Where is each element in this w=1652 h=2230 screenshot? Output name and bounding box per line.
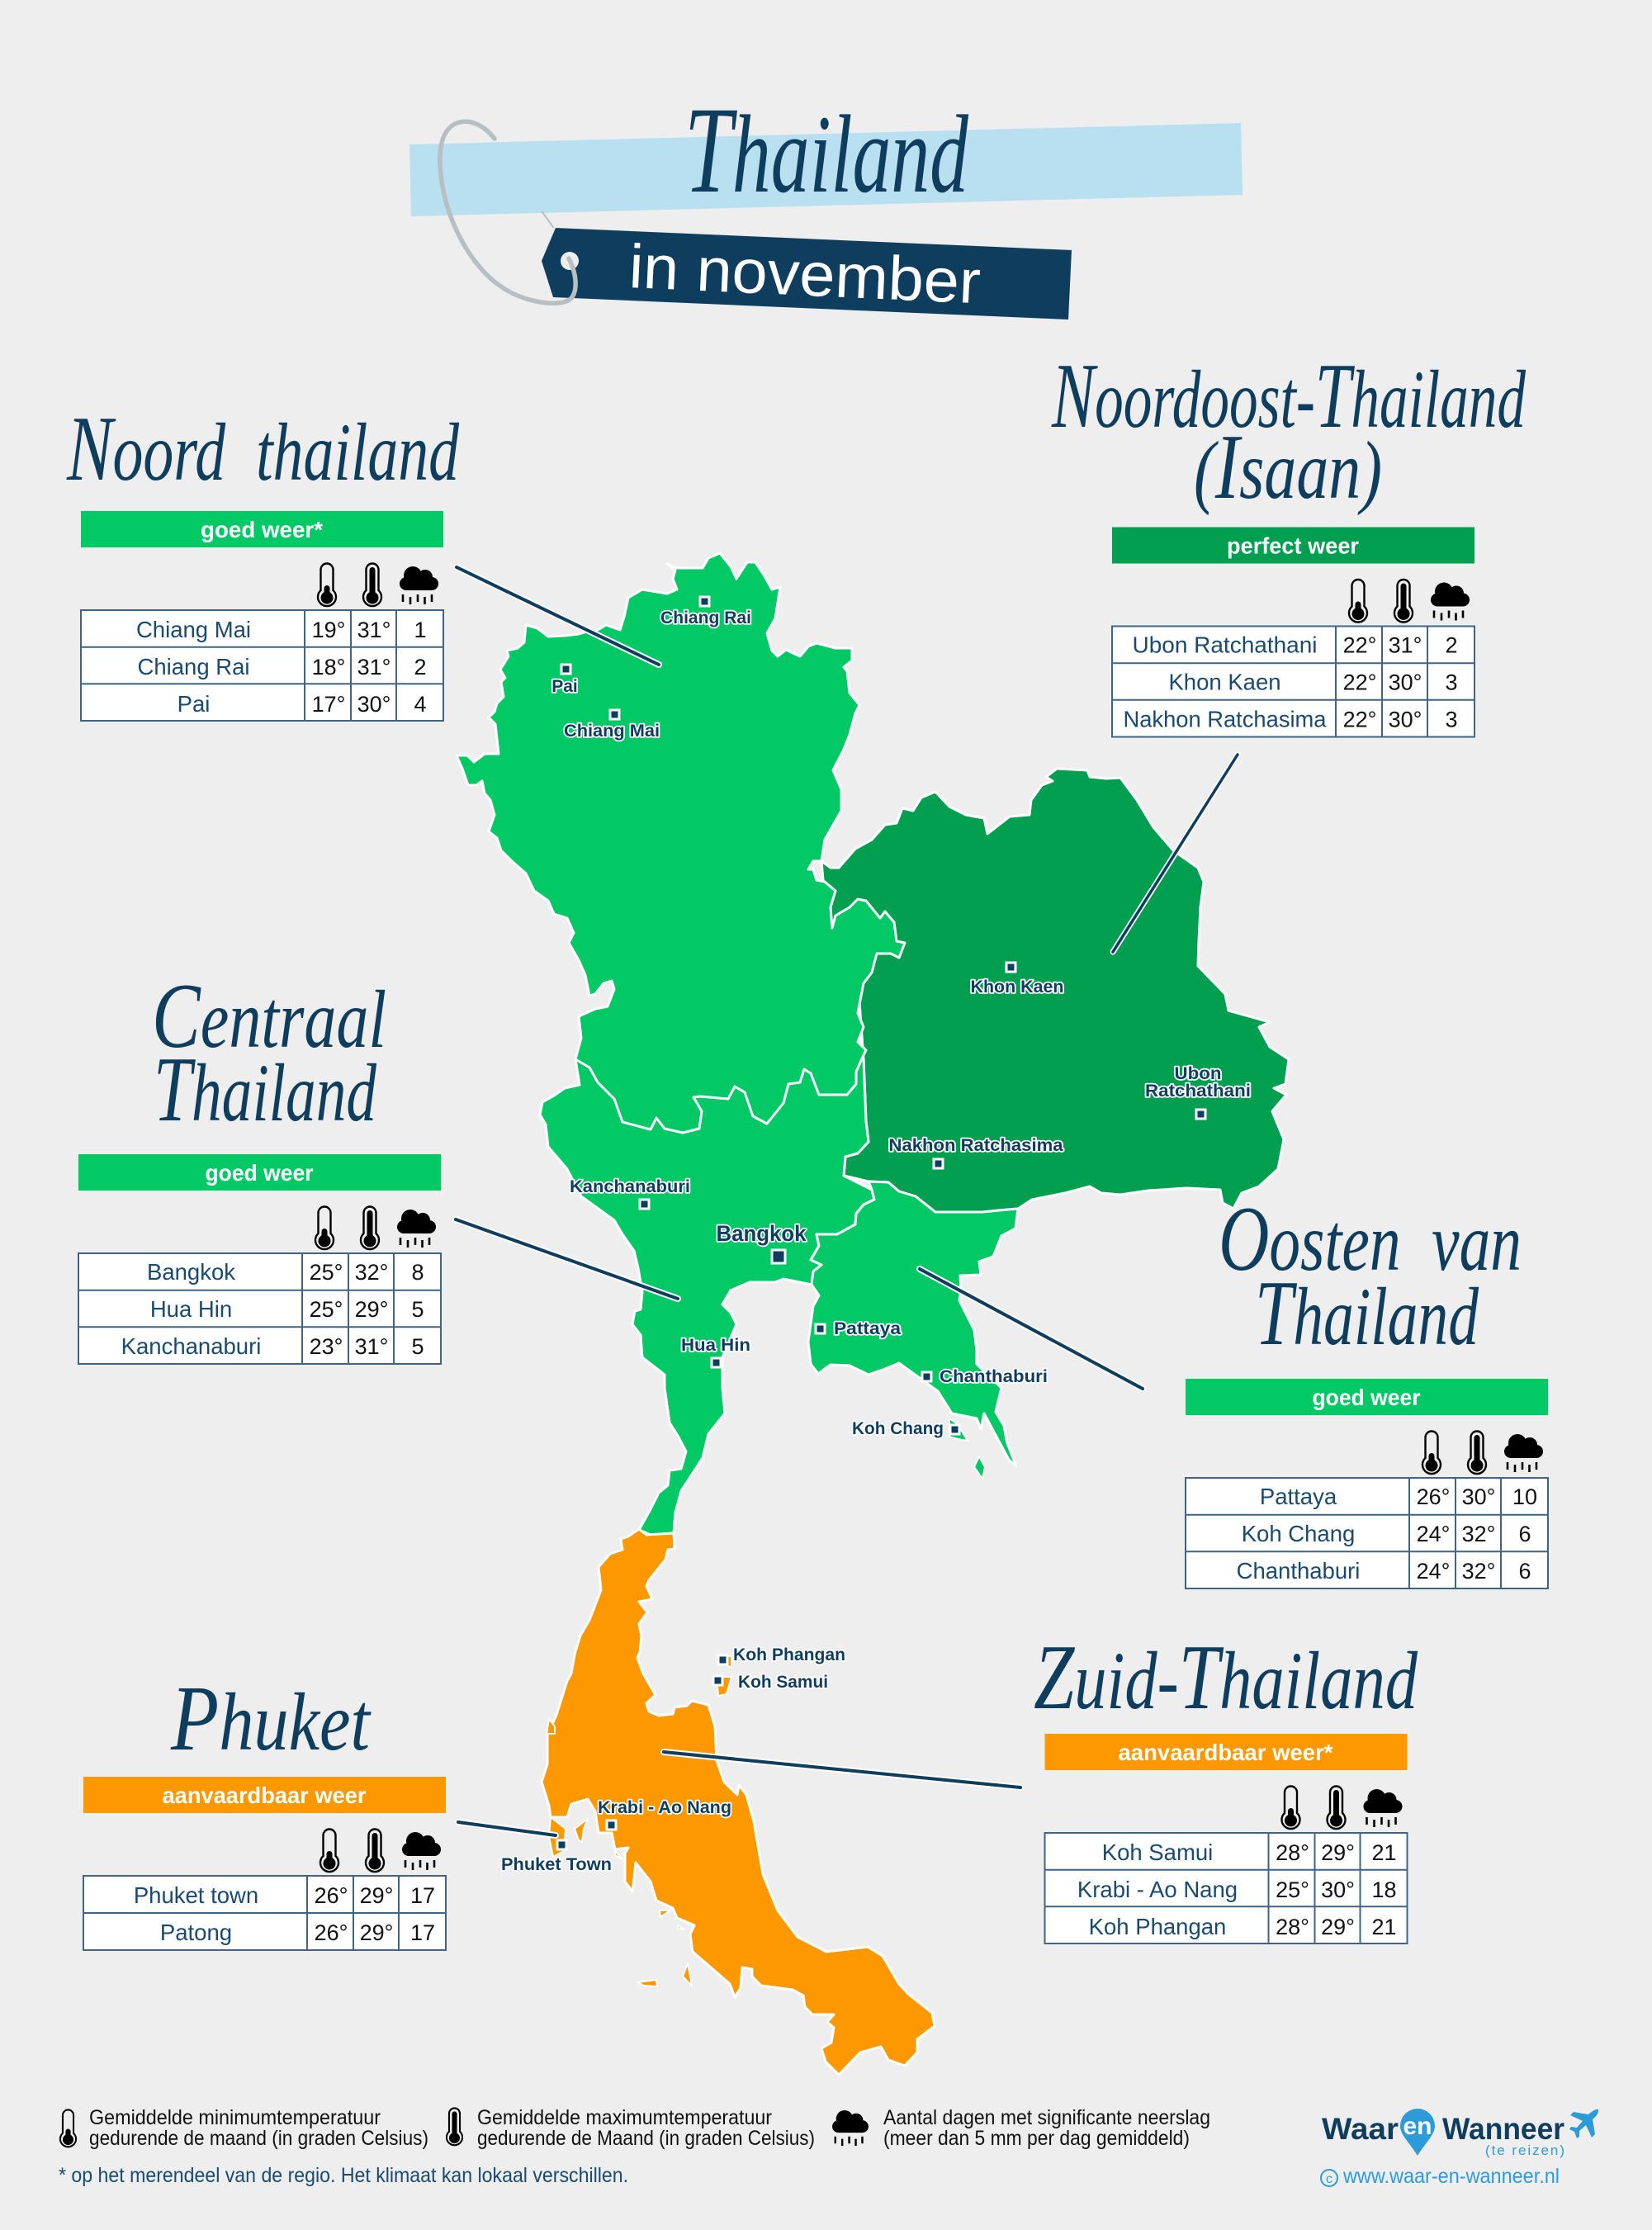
legend text: rain: (meer dan 5 mm per dag gemiddeld) [883,2127,1190,2150]
table: Chanthaburi [1237,1558,1360,1584]
leader line: central [456,1219,678,1299]
city: Koh Phangan: Koh Phangan [733,1645,845,1664]
city: Chanthaburi: Chanthaburi [940,1367,1048,1386]
table: Bangkok [147,1259,235,1285]
table: Koh Phangan [1089,1914,1226,1939]
table [1112,626,1474,736]
table: Chiang Mai [136,617,251,642]
table: 10 [1512,1484,1537,1509]
leader line: east [920,1269,1143,1389]
table: 29° [360,1883,393,1908]
legend text: rain: Aantal dagen met significante neerslag [883,2106,1210,2129]
city markers [501,597,1251,1874]
heading [152,966,386,1141]
icon: max temperature [361,1207,379,1249]
table: Nakhon Ratchasima [1123,707,1327,731]
table [81,610,443,721]
city: Nakhon Ratchasima [888,1136,1063,1168]
table [78,1253,441,1364]
rating bar [83,1777,446,1813]
table: Patong [160,1920,232,1945]
rating bar: aanvaardbaar weer* [1118,1740,1333,1765]
table: Hua Hin [150,1296,232,1322]
city: Chiang Rai [660,597,751,627]
table: 30° [357,692,391,717]
city: Pai: Pai [551,677,578,696]
table: 28° [1276,1840,1309,1865]
rating bar: perfect weer [1227,533,1359,558]
table: Koh Chang [1242,1521,1355,1546]
heading: Noord thailand [66,399,460,500]
table: 3 [1445,670,1458,695]
table: Pattaya [1260,1484,1337,1509]
table: 17° [312,692,345,717]
table: 4 [414,692,427,717]
city: Hua Hin [681,1336,750,1367]
city: Ubon Ratchathani: Ratchathani [1145,1082,1251,1101]
city: Bangkok: Bangkok [717,1221,807,1246]
icon: min temperature [1281,1787,1299,1829]
table: Kanchanaburi [121,1333,261,1359]
panel: Zuid-Thailand [1034,1627,1418,1944]
table: 26° [315,1883,348,1908]
panel: Noordoost-Thailand [1051,346,1527,736]
table: 30° [1389,670,1422,695]
city: Koh Samui: Koh Samui [738,1673,828,1692]
table: 2 [414,655,427,679]
region: north [457,553,905,1133]
rating bar [81,511,443,547]
table: Ubon Ratchathani [1133,632,1317,657]
tag: in november: in november [627,231,982,316]
tag string back [542,212,553,227]
panel: Noord thailand [66,399,460,721]
icon: min temperature [315,1207,334,1249]
heading: Thailand [154,1039,377,1141]
icon: min temperature [318,563,336,606]
icon: rain [1364,1789,1402,1827]
icon: rain [400,566,438,604]
table: 25° [310,1260,343,1285]
legend text: rain [883,2106,1210,2150]
table: 17 [410,1920,435,1945]
logo: Waar en Wanneer: Waar [1322,2112,1399,2146]
icon: min temperature [1349,580,1367,623]
rating bar [1045,1734,1407,1770]
city: Chiang Mai [564,710,660,741]
icon: legend min temperature [60,2109,76,2147]
table: 25° [1276,1877,1309,1902]
icon: rain [1431,583,1470,621]
weather panel [78,1154,441,1364]
icon: min temperature [320,1830,338,1872]
table: 26° [315,1920,348,1945]
table: Phuket town [134,1882,258,1908]
icon: airplane [1569,2109,1598,2138]
table: 32° [355,1260,388,1285]
tag ring [440,121,575,303]
leader line: Phuket [458,1822,556,1835]
region: north-east [821,769,1289,1212]
city: Phuket Town [501,1840,612,1874]
heading [1051,346,1527,518]
table: Koh Samui [1102,1839,1213,1865]
legend text: max temperature: Gemiddelde maximumtemperatuur [477,2106,772,2129]
rating bar [1112,527,1474,563]
legend text: max temperature [477,2106,815,2150]
leader line: south [664,1752,1020,1787]
website link: www.waar-en-wanneer.nl [1342,2165,1560,2188]
table: 29° [355,1297,388,1322]
table: 3 [1445,707,1458,731]
icon: rain [397,1210,436,1248]
table: 22° [1343,670,1376,695]
legend text: min temperature: Gemiddelde minimumtemperatuur [89,2106,381,2129]
table: 5 [411,1334,424,1359]
icon: legend max temperature [447,2108,462,2145]
weather panel [1112,527,1474,736]
table: 31° [357,618,391,642]
city: Nakhon Ratchasima: Nakhon Ratchasima [888,1136,1063,1155]
heading: (Isaan) [1194,417,1382,518]
icon: map pin: en [1403,2113,1432,2140]
city: Chiang Rai: Chiang Rai [660,608,751,627]
table: 21 [1371,1915,1397,1939]
weather panel [81,511,443,721]
table: Krabi - Ao Nang [1077,1877,1238,1902]
heading [1219,1189,1522,1365]
legend text: min temperature [89,2106,428,2150]
rating bar: aanvaardbaar weer [162,1783,367,1808]
table: 28° [1276,1915,1309,1939]
heading: Oosten van [1219,1189,1522,1290]
city: Koh Chang: Koh Chang [852,1419,944,1438]
heading: Zuid- Thailand [1034,1627,1418,1729]
table: 25° [310,1297,343,1322]
icon: max temperature [1468,1432,1486,1474]
table: 17 [410,1883,435,1908]
tag: in november [542,228,1072,320]
icon: max temperature [1394,580,1413,623]
table: 22° [1343,632,1376,657]
table: 19° [312,618,345,642]
panel: Phuket [83,1669,446,1950]
title ribbon [409,123,1243,216]
legend text: min temperature: gedurende de maand (in graden Celsius) [89,2127,428,2150]
city: Kanchanaburi [570,1177,690,1209]
icon: max temperature [366,1830,384,1872]
table: 18° [312,655,345,679]
table: 30° [1321,1877,1355,1902]
region: central [540,1032,874,1535]
weather panel [1045,1734,1407,1944]
table: 26° [1417,1484,1450,1509]
table: 24° [1417,1559,1450,1584]
table: 6 [1518,1522,1531,1546]
heading: Centraal [152,966,386,1068]
rating bar: goed weer* [201,517,323,542]
table: 18 [1371,1877,1397,1902]
city: Ubon Ratchathani: Ubon [1174,1064,1222,1083]
table: Pai [178,691,210,717]
city: Ubon Ratchathani [1145,1064,1251,1119]
city: Pattaya: Pattaya [834,1319,901,1338]
table: 31° [1389,632,1422,657]
weather panel [83,1777,446,1950]
city: Krabi - Ao Nang: Krabi - Ao Nang [598,1798,731,1817]
footnote: * op het merendeel van de regio. Het klimaat kan lokaal verschillen. [59,2164,628,2187]
table: 23° [310,1334,343,1359]
region: south [542,1529,935,2075]
logo: Waar en Wanneer [1322,2109,1598,2158]
city: Khon Kaen: Khon Kaen [971,978,1063,997]
icon: rain [402,1832,441,1870]
table: 32° [1462,1522,1495,1546]
logo: Waar en Wanneer: Wanneer [1442,2112,1564,2146]
table [83,1876,446,1950]
city: Krabi - Ao Nang [598,1798,731,1830]
table: Chiang Rai [137,654,250,679]
city: Phuket Town: Phuket Town [501,1855,612,1874]
heading: Noordoost- Thailand [1051,346,1527,447]
title block [409,81,1243,320]
table: 8 [411,1260,424,1285]
table: 22° [1343,707,1376,731]
table: 29° [1321,1840,1355,1865]
table: 31° [355,1334,388,1359]
title: Thailand: Thailand [684,81,969,219]
table: 21 [1371,1840,1397,1865]
rating bar: goed weer [1313,1385,1421,1410]
table [1045,1833,1407,1944]
panel: Centraal Thailand [78,966,441,1364]
table: 6 [1518,1559,1531,1584]
table: Khon Kaen [1168,669,1281,695]
city: Bangkok [717,1221,807,1263]
region: east [808,1181,1018,1479]
icon: max temperature [1328,1787,1346,1829]
table: 5 [411,1297,424,1322]
weather panel [1186,1379,1548,1588]
icon: rain [1504,1434,1543,1472]
legend [60,2106,1210,2150]
city: Kanchanaburi: Kanchanaburi [570,1177,690,1196]
city: Chiang Mai: Chiang Mai [564,722,660,741]
heading: Phuket [170,1669,372,1770]
website link: c [1326,2172,1332,2186]
heading: Thailand [1255,1263,1479,1365]
table: 30° [1389,707,1422,731]
logo: Waar en Wanneer: (te reizen) [1485,2142,1564,2158]
table [1186,1478,1548,1588]
legend text: max temperature: gedurende de Maand (in graden Celsius) [477,2127,815,2150]
leader line: north [457,567,659,665]
table: 24° [1417,1522,1450,1546]
table: 2 [1445,632,1458,657]
city: Pai [551,665,578,696]
table: 31° [357,655,391,679]
icon: max temperature [363,563,381,606]
rating bar [78,1154,441,1191]
table: 29° [1321,1915,1355,1939]
table: 32° [1462,1559,1495,1584]
icon: legend rain [832,2110,869,2146]
city: Khon Kaen [971,963,1063,997]
map of Thailand [457,553,1289,2075]
city: Hua Hin: Hua Hin [681,1336,750,1355]
leader line: north-east [1113,755,1238,952]
panel: Oosten van Thailand [1186,1189,1548,1588]
table: 30° [1462,1484,1495,1509]
rating bar: goed weer [205,1160,314,1186]
icon: map pin [1400,2109,1435,2156]
table: 1 [414,618,427,642]
table: 29° [360,1920,393,1945]
icon: min temperature [1422,1432,1441,1474]
rating bar [1186,1379,1548,1415]
